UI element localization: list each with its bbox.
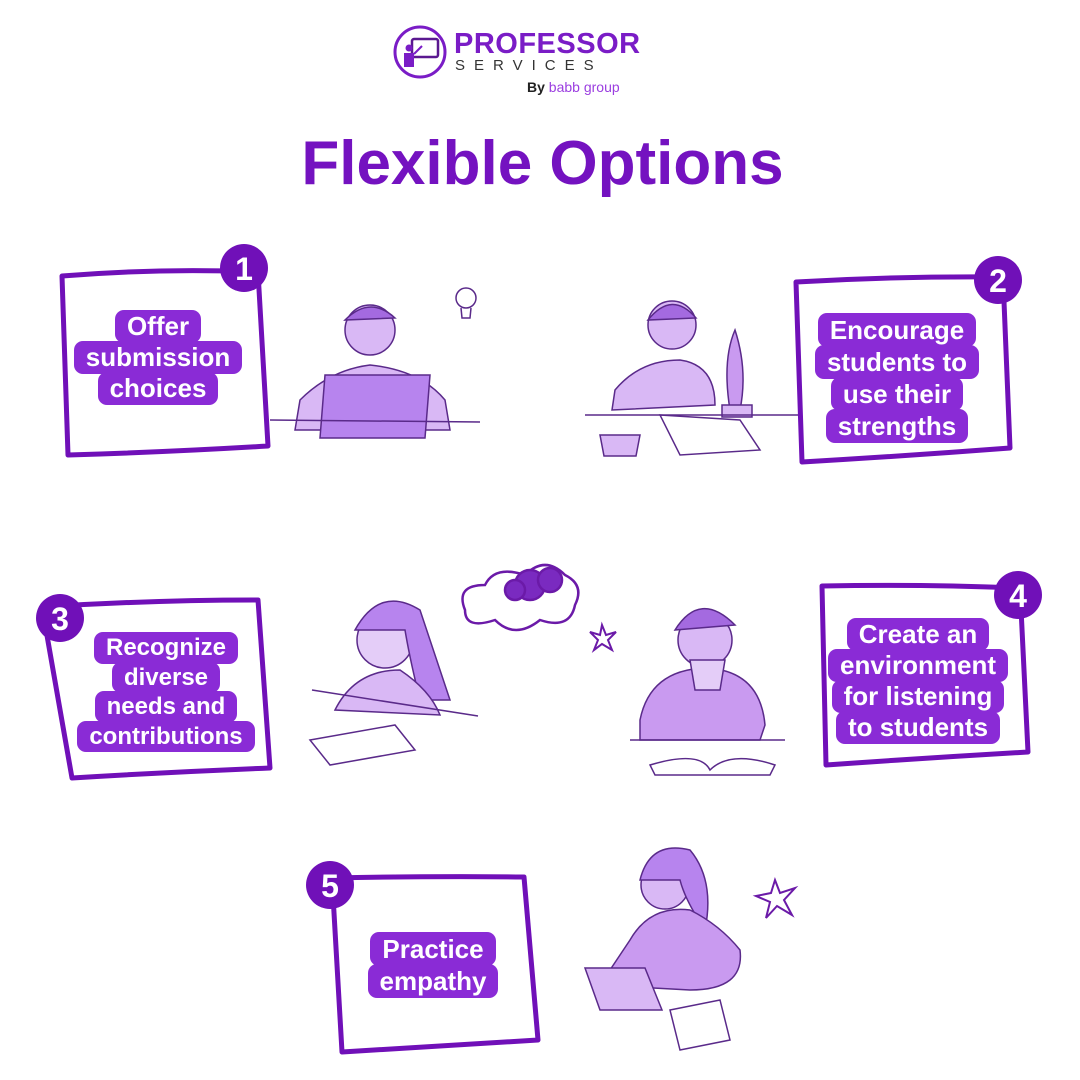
text: encourage strengths: use their	[843, 379, 951, 409]
text: environment for listening: Create an	[859, 619, 977, 649]
text: environment for listening: environment	[840, 650, 996, 680]
frames: 2	[989, 263, 1007, 299]
logo: By babb group	[527, 79, 620, 95]
text: offer submission choices: submission	[86, 342, 230, 372]
frames: 3	[51, 601, 69, 637]
logo: PROFESSOR	[454, 28, 641, 60]
text: encourage strengths: students to	[827, 347, 967, 377]
text: recognize diverse needs: diverse	[124, 664, 208, 690]
text: recognize diverse needs: Recognize	[106, 634, 226, 661]
cloud	[462, 565, 578, 630]
text: recognize diverse needs: contributions	[89, 722, 243, 750]
text: offer submission choices	[74, 310, 242, 405]
text: practice empathy: empathy	[380, 966, 486, 996]
text: encourage strengths	[815, 313, 979, 443]
logo	[394, 26, 641, 95]
text: offer submission choices: Offer	[127, 311, 189, 341]
text: environment for listening: to students	[848, 712, 988, 742]
frames: 1	[235, 251, 253, 287]
logo: SERVICES	[455, 57, 603, 74]
sparkles	[590, 625, 795, 918]
student 5 laptop on floor	[585, 848, 740, 1050]
student 3 thinking	[310, 601, 478, 765]
text: practice empathy	[368, 932, 498, 998]
frames: 4	[1009, 578, 1027, 614]
text: recognize diverse needs	[77, 632, 255, 752]
student 4 drinking	[630, 609, 785, 775]
student 2 writing	[585, 301, 800, 456]
text: encourage strengths: strengths	[838, 411, 956, 441]
text: environment for listening: for listening	[844, 681, 992, 711]
text: recognize diverse needs: needs and	[107, 693, 225, 720]
bulb	[456, 288, 476, 318]
title: Flexible Options	[301, 129, 784, 198]
frames: 5	[321, 868, 339, 904]
text: environment for listening	[828, 618, 1008, 744]
student 1 with laptop	[270, 305, 480, 438]
text: practice empathy: Practice	[382, 934, 484, 964]
text: offer submission choices: choices	[110, 373, 206, 403]
icon: professor at board	[394, 26, 446, 78]
text: encourage strengths: Encourage	[830, 315, 964, 345]
